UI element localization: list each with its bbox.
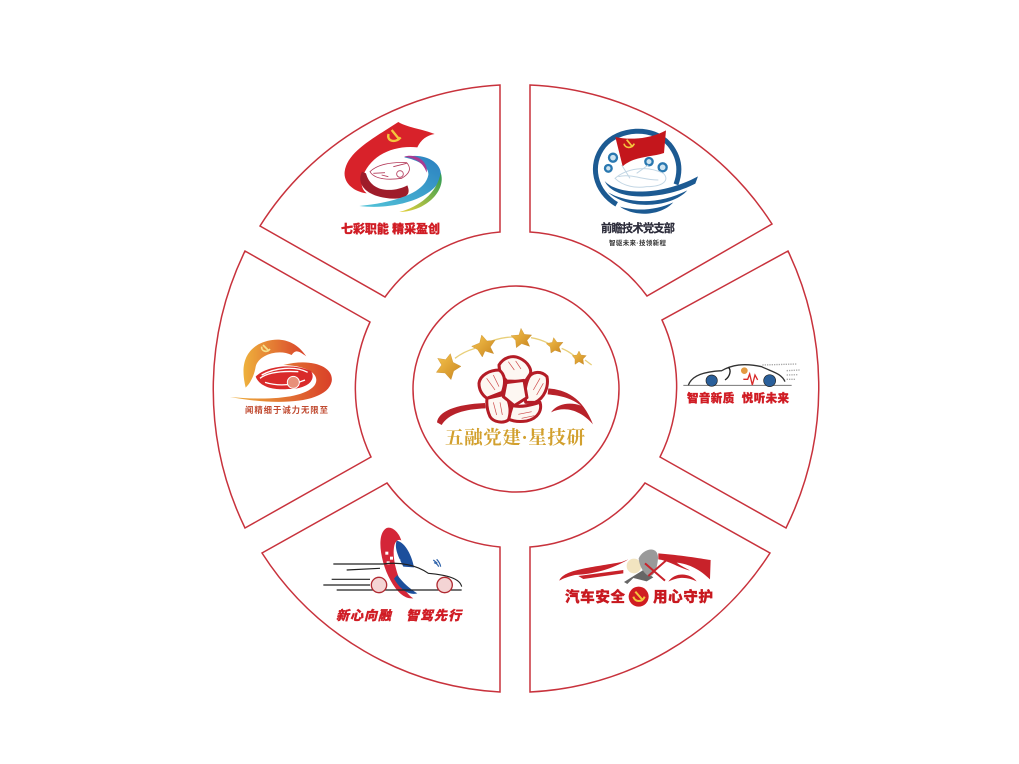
icon: road line bbox=[683, 384, 792, 387]
icon: red car silhouette bbox=[559, 553, 711, 582]
logo caption: car safety left: 汽车安全 bbox=[565, 588, 626, 606]
icon: wheels bbox=[706, 375, 776, 387]
logo: frontier technology branch (top-right) bbox=[595, 130, 698, 214]
icon: seated passenger with airbag bbox=[627, 559, 641, 573]
icon: orange red speed swoosh bbox=[230, 362, 332, 402]
icon: car line drawing bbox=[370, 162, 409, 179]
icon: blue waves bbox=[605, 176, 698, 214]
panel: top-right segment outline bbox=[530, 85, 772, 296]
logo: new heart smart drive (bottom-left) bbox=[323, 528, 462, 598]
icon: speed lines bbox=[762, 364, 800, 379]
icon: blue ring bbox=[595, 131, 679, 204]
icon: pale car outline bbox=[615, 165, 666, 187]
icon: teal blue stripes bbox=[359, 156, 441, 207]
panel: bottom-left segment outline bbox=[262, 483, 500, 692]
icon: blue loop bbox=[394, 541, 417, 594]
logo caption: car safety right: 用心守护 bbox=[653, 588, 713, 606]
panel: right segment outline bbox=[660, 251, 819, 528]
icon: red loop bbox=[380, 528, 413, 598]
central badge: five integrations logo bbox=[436, 328, 593, 425]
icon: red car bbox=[256, 366, 313, 389]
panel: left segment outline bbox=[213, 251, 371, 528]
panel: bottom-right segment outline bbox=[530, 483, 770, 692]
icon: five gold stars bbox=[436, 328, 586, 380]
logo subcaption: frontier technology branch: 智驱未来·技领新程 bbox=[609, 238, 666, 247]
icon: wifi signal bbox=[433, 559, 441, 567]
panel: top-left segment outline bbox=[260, 85, 500, 297]
icon: star trail bbox=[455, 337, 592, 365]
logo: car safety (bottom-right) bbox=[559, 550, 711, 607]
logo caption: colourful functions: 七彩职能 精采盈创 bbox=[341, 221, 440, 236]
icon: orange chip bbox=[741, 367, 748, 374]
icon: five clasped hands bbox=[479, 357, 547, 422]
icon: music note and sound wave bbox=[725, 367, 758, 385]
icon: car body and speed lines bbox=[323, 563, 462, 590]
icon: orange flag swoosh bbox=[244, 340, 306, 388]
icon: emblem bbox=[262, 345, 270, 351]
logo caption: frontier technology branch: 前瞻技术党支部 bbox=[601, 221, 675, 235]
icon: wheels bbox=[371, 577, 452, 593]
panel: central circle outline bbox=[413, 286, 619, 492]
icon: hammer and sickle bbox=[388, 130, 401, 141]
logo: left panel flag and car bbox=[230, 340, 332, 402]
icon: red gear party emblem bbox=[629, 587, 649, 607]
logo caption: left panel: 闻精细于诚力无限至 bbox=[245, 405, 328, 415]
icon: checker pattern bbox=[385, 552, 404, 571]
icon: flag emblem bbox=[624, 140, 634, 147]
icon: car outline bbox=[688, 365, 785, 385]
logo: colourful functions (top-left) bbox=[345, 122, 442, 212]
icon: red flag swoosh bbox=[345, 122, 435, 193]
logo caption: new heart smart drive: 新心向融 智驾先行 bbox=[336, 608, 463, 623]
icon: red flag bbox=[615, 130, 666, 166]
logo: smart sound car (right) bbox=[683, 364, 800, 387]
central badge title: 五融党建·星技研 bbox=[445, 427, 585, 449]
icon: finger lines bbox=[487, 361, 543, 418]
icon: round technology badges bbox=[605, 154, 667, 172]
icon: red car silhouette bbox=[437, 388, 593, 425]
logo caption: smart sound car: 智音新质 悦听未来 bbox=[687, 391, 790, 405]
